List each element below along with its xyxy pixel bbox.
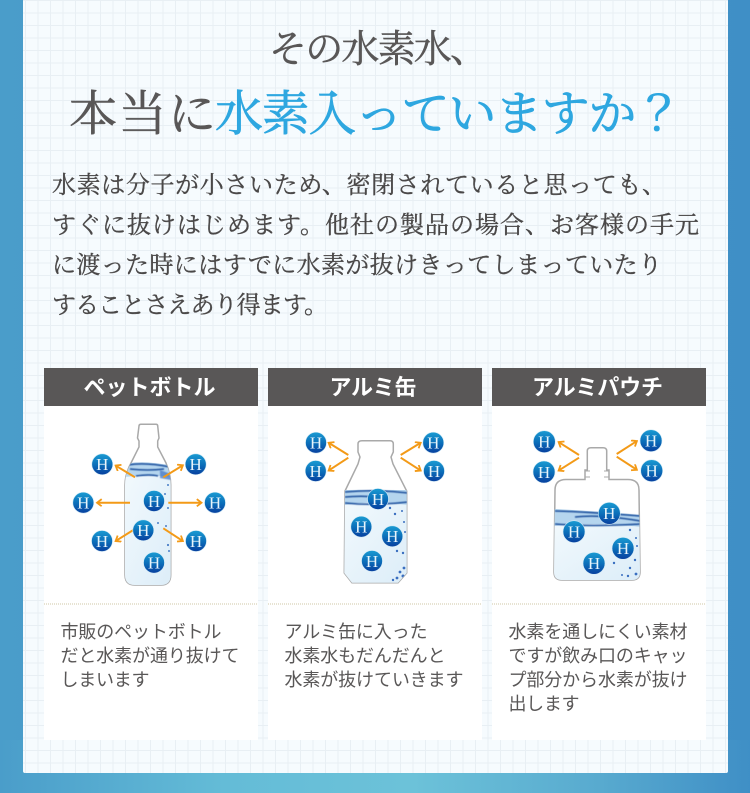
arrows: [98, 466, 201, 541]
description: aluminium pouch: プ部分から水素が抜け: [508, 670, 688, 690]
description: aluminium can: 水素が抜けていきます: [284, 670, 464, 690]
hydrogen molecules: H: [428, 462, 440, 481]
hydrogen molecules: [73, 454, 226, 573]
hydrogen molecules: H: [77, 494, 89, 512]
hydrogen molecules: H: [603, 504, 615, 523]
hydrogen molecules: [533, 430, 663, 574]
description: aluminium pouch: 水素を通しにくい素材: [508, 622, 688, 642]
hydrogen molecules: H: [538, 463, 550, 482]
hydrogen molecules: H: [148, 492, 160, 511]
description: PET bottle: [60, 622, 240, 690]
panel: PET bottle: [44, 368, 258, 740]
intro text: することさえあり得ます。: [52, 292, 328, 319]
hydrogen molecules: H: [538, 432, 550, 452]
arrows: [329, 443, 420, 470]
hydrogen molecules: H: [310, 462, 322, 481]
illustration: PET bottle with hydrogen escaping: [73, 424, 226, 586]
header: aluminium pouch: アルミパウチ: [532, 375, 663, 400]
hydrogen molecules: H: [372, 490, 384, 509]
hydrogen molecules: H: [617, 539, 629, 558]
title: [69, 29, 683, 141]
intro text: すぐに抜けはじめます。他社の製品の場合、お客様の手元: [52, 212, 699, 239]
hydrogen molecules: H: [96, 532, 108, 551]
hydrogen molecules: H: [568, 522, 580, 542]
hydrogen molecules: H: [386, 527, 398, 546]
hydrogen molecules: [305, 432, 444, 572]
arrows: [559, 441, 636, 470]
header: aluminium can: アルミ缶: [330, 375, 416, 400]
header: PET bottle: [44, 368, 258, 406]
intro text: [52, 172, 699, 319]
hydrogen molecules: H: [148, 554, 160, 572]
description: aluminium can: 水素水もだんだんと: [284, 646, 446, 666]
title line 2: 水素入っていますか？: [215, 88, 683, 141]
panel: aluminium can: [268, 368, 482, 740]
description: PET bottle: 市販のペットボトル: [60, 622, 222, 642]
hydrogen molecules: H: [190, 455, 202, 474]
hydrogen molecules: H: [646, 462, 658, 480]
title line 2: 本当に: [69, 88, 216, 141]
intro text: に渡った時にはすでに水素が抜けきってしまっていたり: [52, 252, 662, 279]
hydrogen molecules: H: [209, 494, 221, 512]
hydrogen molecules: H: [96, 455, 108, 474]
header: aluminium can: [268, 368, 482, 406]
hydrogen molecules: H: [190, 532, 202, 551]
header: PET bottle: ペットボトル: [84, 375, 216, 400]
header: aluminium pouch: [492, 368, 706, 406]
description: aluminium can: アルミ缶に入った: [284, 622, 428, 642]
description: aluminium pouch: 出します: [508, 694, 580, 714]
hydrogen molecules: H: [427, 434, 439, 452]
title line 1: その水素水、: [269, 29, 488, 71]
illustration: aluminium pouch with hydrogen escaping: [533, 430, 663, 581]
intro text: 水素は分子が小さいため、密閉されていると思っても、: [52, 172, 666, 199]
description: PET bottle: しまいます: [60, 670, 150, 690]
hydrogen molecules: H: [366, 552, 378, 571]
description: aluminium can: [284, 622, 464, 690]
hydrogen molecules: H: [137, 521, 149, 540]
panel: aluminium pouch: [492, 368, 706, 740]
description: aluminium pouch: ですが飲み口のキャッ: [508, 646, 688, 666]
description: PET bottle: だと水素が通り抜けて: [60, 646, 240, 666]
hydrogen molecules: H: [310, 434, 322, 452]
hydrogen molecules: H: [355, 518, 367, 536]
description: aluminium pouch: [508, 622, 688, 714]
hydrogen molecules: H: [645, 432, 657, 450]
illustration: aluminium bottle can with hydrogen escaping: [305, 432, 444, 584]
hydrogen molecules: H: [588, 554, 600, 573]
